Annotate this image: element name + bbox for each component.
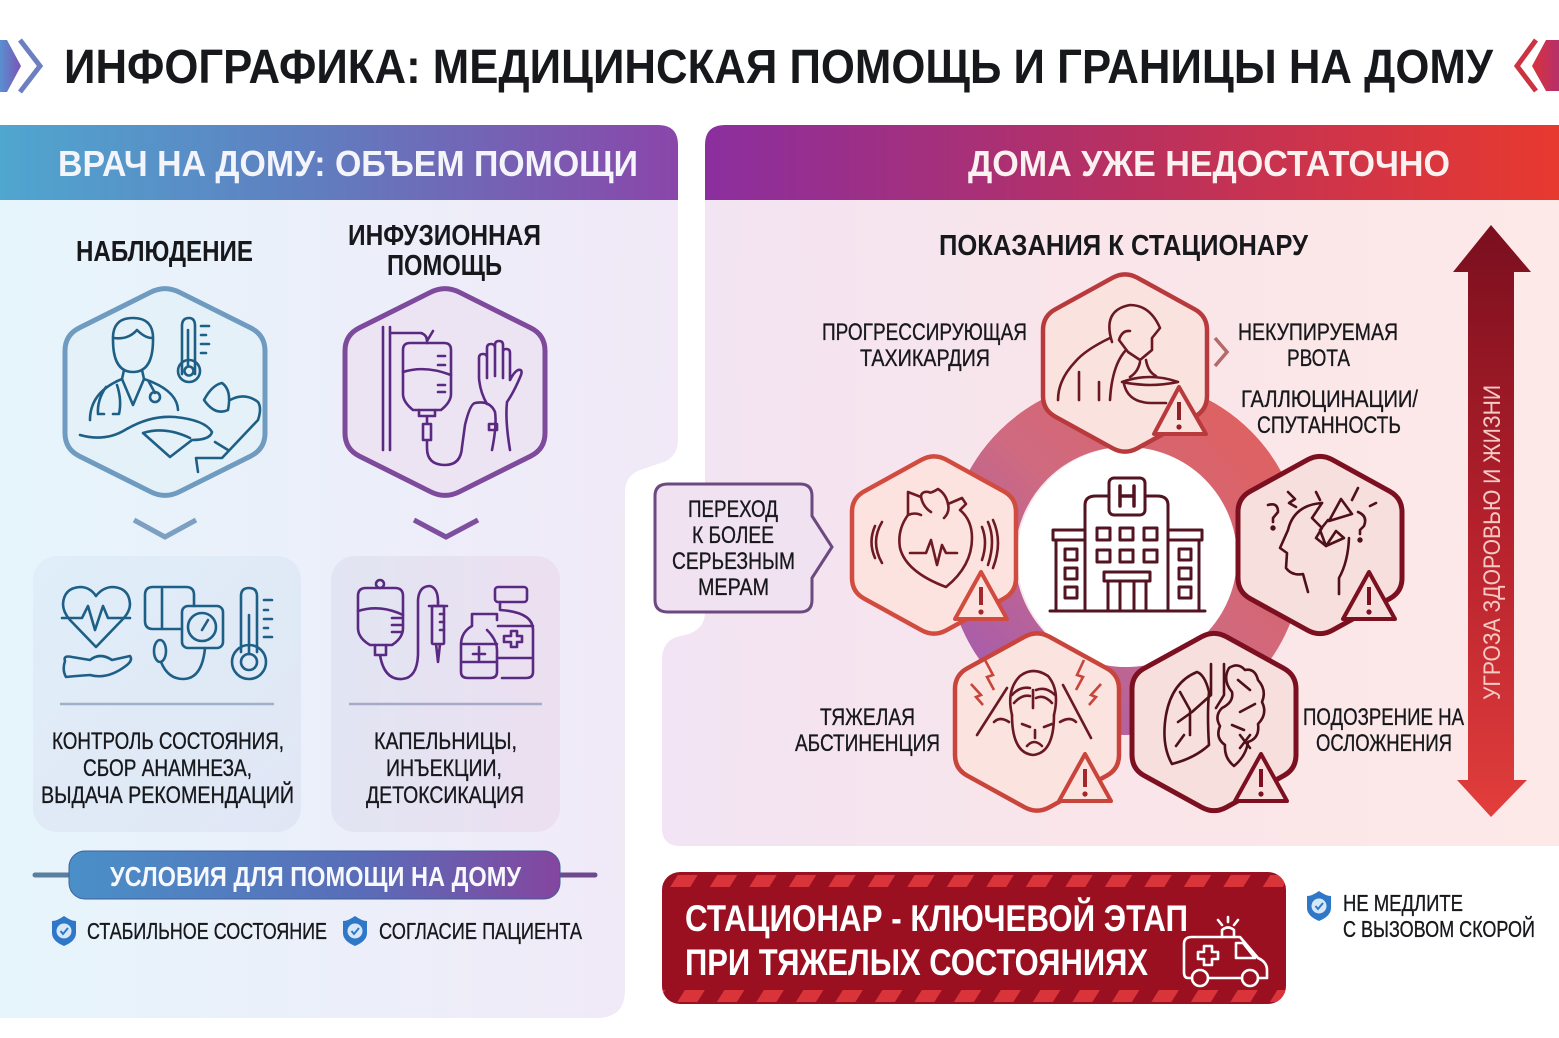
conditions banner: УСЛОВИЯ ДЛЯ ПОМОЩИ НА ДОМУ	[110, 861, 521, 892]
icon: hospital	[1017, 447, 1237, 667]
callout: escalation: ПЕРЕХОД	[688, 496, 778, 523]
condition: stable state	[52, 916, 327, 946]
arrow: small chevron	[1215, 338, 1227, 366]
icon: warning	[1059, 754, 1111, 801]
label: progressive tachycardia: ПРОГРЕССИРУЮЩАЯ	[822, 319, 1027, 346]
text block: monitoring: СБОР АНАМНЕЗА,	[83, 755, 252, 782]
conditions banner	[35, 851, 595, 899]
text block: monitoring	[41, 728, 294, 809]
arrow: down chevron observation	[134, 520, 196, 537]
text block: monitoring: КОНТРОЛЬ СОСТОЯНИЯ,	[52, 728, 284, 755]
icon: warning	[1343, 572, 1395, 619]
callout: escalation	[655, 484, 832, 612]
label: suspected complications	[1303, 704, 1464, 757]
banner text: СТАЦИОНАР - КЛЮЧЕВОЙ ЭТАП	[685, 897, 1188, 939]
icon: headache hexagon	[955, 633, 1119, 811]
label: severe withdrawal: ТЯЖЕЛАЯ	[820, 704, 915, 731]
icon: lungs and brain hexagon	[1132, 633, 1296, 811]
callout: escalation: К БОЛЕЕ	[692, 522, 774, 549]
icon: shield	[343, 916, 367, 946]
arrow: threat to health and life	[1453, 225, 1531, 817]
icon: confused head hexagon	[1238, 456, 1402, 634]
label: intractable vomiting: РВОТА	[1287, 345, 1350, 372]
panel background	[662, 200, 1559, 846]
card: infusions	[331, 556, 560, 832]
arrow: down chevron infusion	[414, 520, 478, 537]
label: intractable vomiting	[1238, 319, 1398, 372]
icon: warning	[955, 572, 1007, 619]
subheading: indications: ПОКАЗАНИЯ К СТАЦИОНАРУ	[939, 230, 1309, 262]
ring around hospital	[981, 413, 1269, 701]
condition: patient consent: СОГЛАСИЕ ПАЦИЕНТА	[379, 918, 583, 944]
icon: right title ornament	[1517, 40, 1559, 91]
label: severe withdrawal: АБСТИНЕНЦИЯ	[795, 730, 940, 757]
icon: vomiting hexagon	[1043, 274, 1207, 452]
banner: hospital key stage	[662, 872, 1286, 1004]
note: call ambulance: НЕ МЕДЛИТЕ	[1343, 890, 1463, 916]
condition: patient consent	[343, 916, 583, 946]
column heading: infusion care	[348, 220, 541, 282]
callout: escalation: МЕРАМ	[698, 574, 769, 601]
label: progressive tachycardia: ТАХИКАРДИЯ	[860, 345, 990, 372]
label: severe withdrawal	[795, 704, 940, 757]
text block: infusions: ИНЪЕКЦИИ,	[386, 755, 502, 782]
panel heading	[0, 125, 678, 200]
icon: doctor and patient hexagon	[65, 289, 265, 495]
column heading: observation: НАБЛЮДЕНИЕ	[76, 236, 253, 268]
icon: warning	[1154, 387, 1206, 434]
column heading: infusion care: ИНФУЗИОННАЯ	[348, 220, 541, 252]
panel heading: ВРАЧ НА ДОМУ: ОБЪЕМ ПОМОЩИ	[58, 143, 638, 184]
text block: infusions	[366, 728, 524, 809]
card: monitoring	[33, 556, 301, 832]
text block: infusions: КАПЕЛЬНИЦЫ,	[374, 728, 517, 755]
label: intractable vomiting: НЕКУПИРУЕМАЯ	[1238, 319, 1398, 346]
condition: stable state: СТАБИЛЬНОЕ СОСТОЯНИЕ	[87, 918, 327, 944]
label: progressive tachycardia	[822, 319, 1027, 372]
icon: IV drip hexagon	[345, 289, 545, 495]
panel: home care no longer enough	[662, 125, 1559, 846]
icon: drip, syringe, vials	[358, 580, 533, 679]
label: hallucinations: ГАЛЛЮЦИНАЦИИ/	[1241, 386, 1418, 413]
label: hallucinations: СПУТАННОСТЬ	[1257, 412, 1401, 439]
icon: ambulance	[1184, 917, 1267, 986]
text block: monitoring: ВЫДАЧА РЕКОМЕНДАЦИЙ	[41, 781, 294, 809]
icon: heart, blood pressure cuff, thermometer	[62, 587, 272, 679]
banner text	[685, 897, 1188, 983]
panel background	[0, 200, 678, 1018]
note: call ambulance	[1307, 890, 1535, 942]
icon: left title ornament	[0, 40, 40, 92]
icon: heart hexagon	[852, 456, 1016, 634]
column heading: infusion care: ПОМОЩЬ	[387, 250, 502, 282]
panel heading: ДОМА УЖЕ НЕДОСТАТОЧНО	[968, 143, 1450, 184]
label: hallucinations	[1241, 386, 1418, 439]
label: suspected complications: ОСЛОЖНЕНИЯ	[1316, 730, 1452, 757]
callout: escalation: СЕРЬЕЗНЫМ	[672, 548, 795, 575]
panel heading	[705, 125, 1559, 200]
icon: shield	[52, 916, 76, 946]
arrow: threat to health and life: УГРОЗА ЗДОРОВЬЮ И ЖИЗНИ	[1479, 385, 1506, 700]
icon: warning	[1235, 754, 1287, 801]
banner text: ПРИ ТЯЖЕЛЫХ СОСТОЯНИЯХ	[685, 942, 1148, 983]
panel: doctor at home	[0, 125, 678, 1018]
text block: infusions: ДЕТОКСИКАЦИЯ	[366, 782, 524, 809]
label: suspected complications: ПОДОЗРЕНИЕ НА	[1303, 704, 1464, 731]
icon: shield	[1307, 891, 1331, 921]
